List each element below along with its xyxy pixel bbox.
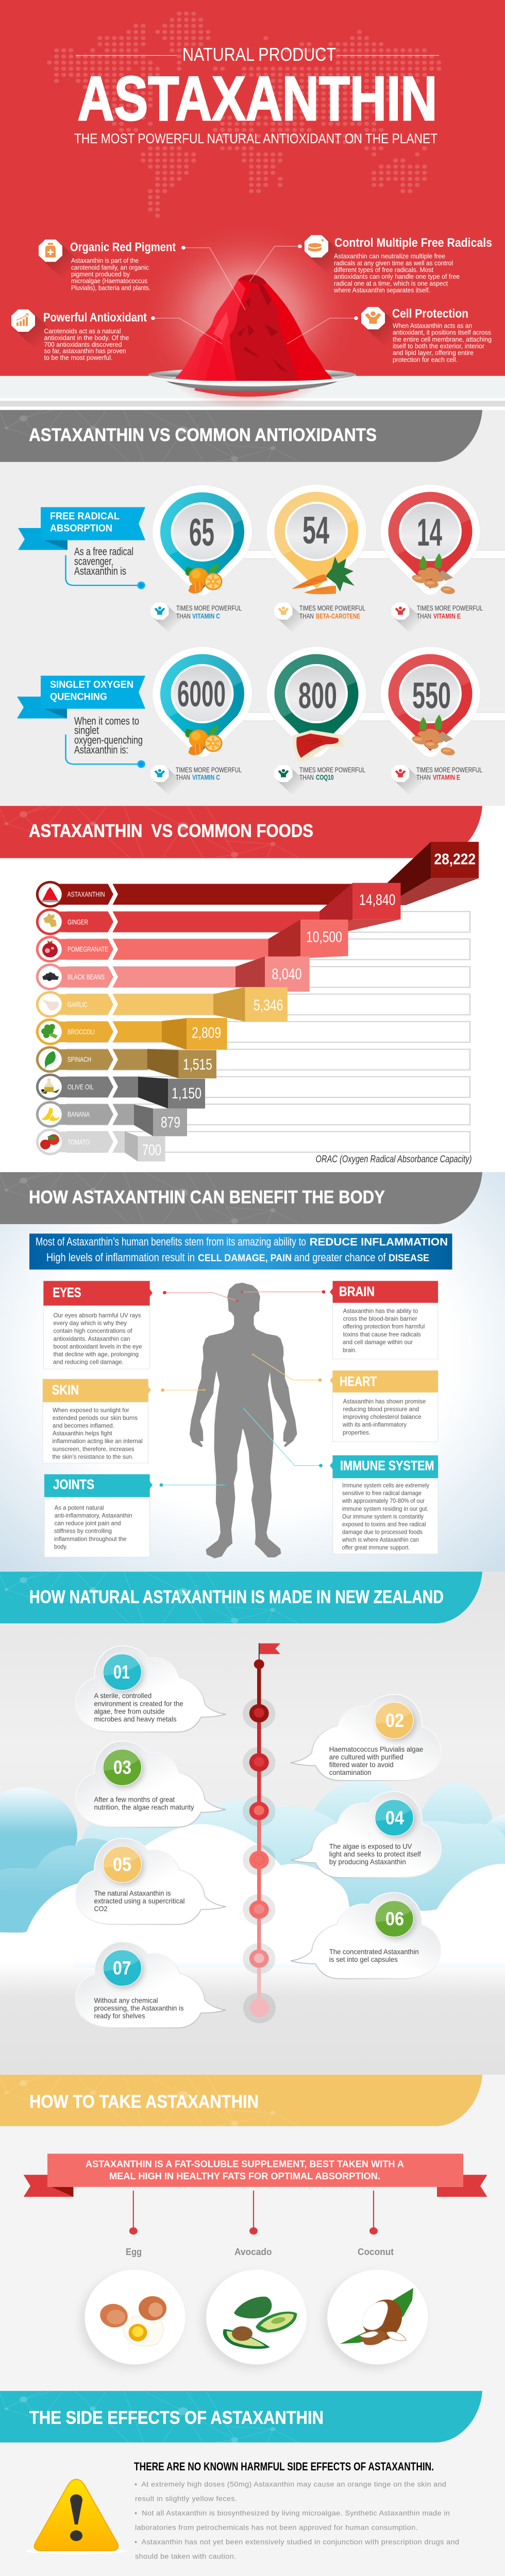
- ribbon: singlet oxygen quenching: QUENCHING: [50, 691, 107, 703]
- feature: control multiple free radicals: [305, 235, 492, 294]
- food: avocado: [206, 2191, 307, 2364]
- feature: control multiple free radicals: Astaxanthin can neutralize multiple free: [334, 252, 445, 260]
- connector strips: [242, 550, 505, 721]
- pin: 550 vitamin e: 550: [412, 675, 451, 716]
- feature: powerful antioxidant: to be the most powerful.: [44, 354, 113, 362]
- feature: cell protection: When Astaxanthin acts as an: [393, 322, 472, 329]
- feature: cell protection: [361, 307, 492, 363]
- banner: reduce inflammation: [29, 1233, 452, 1269]
- step 01: [76, 1646, 226, 1732]
- food: avocado: Avocado: [234, 2246, 272, 2258]
- step 01: A sterile, controlled: [94, 1692, 152, 1700]
- caption: 6000 times vitamin c: VITAMIN C: [192, 774, 220, 782]
- card: brain: brain.: [343, 1347, 357, 1353]
- step 01: algae, free from outside: [94, 1707, 165, 1715]
- step 01: environment is created for the: [94, 1700, 183, 1707]
- card: immune system: with approximately 70-80% of our: [342, 1498, 425, 1504]
- icon: bottle: [39, 240, 80, 279]
- bar: olive oil 1,150: OLIVE OIL: [68, 1083, 94, 1091]
- step 05: 05: [113, 1855, 131, 1875]
- ribbon: free radical absorption: ABSORPTION: [50, 523, 112, 534]
- body silhouette: [190, 1283, 297, 1558]
- food: egg: Egg: [126, 2246, 142, 2258]
- card: skin: the skin’s resistance to the sun.: [53, 1453, 133, 1460]
- card: immune system: damage due to processed foods: [342, 1529, 423, 1535]
- icon: warning triangle: [25, 2479, 127, 2554]
- intro text: singlet oxygen: When it comes to: [74, 715, 139, 727]
- card: eyes: and reducing cell damage.: [53, 1359, 124, 1365]
- panel: astaxanthin vs common antioxidants: [0, 410, 505, 806]
- banner: reduce inflammation: High levels of inflammation result in: [46, 1251, 195, 1264]
- pin: 65 vitamin c: 65: [189, 511, 214, 554]
- card: joints: body.: [54, 1543, 68, 1550]
- card: brain: toxins that cause free radicals: [343, 1331, 421, 1338]
- caption: 54 times beta-carotene: TIMES MORE POWERFUL: [299, 605, 365, 613]
- step 06: The concentrated Astaxanthin: [329, 1948, 419, 1956]
- card: eyes: every day which is why they: [54, 1319, 127, 1327]
- section header: [0, 806, 482, 858]
- banner: reduce inflammation: REDUCE INFLAMMATION: [310, 1235, 448, 1248]
- step 01: 01: [113, 1662, 130, 1683]
- icon: coconut with palm leaf: [340, 2288, 413, 2345]
- caption: 6000 times vitamin c: THAN: [176, 774, 190, 782]
- pin: 54 beta-carotene: 54: [302, 509, 329, 552]
- card: joints: [44, 1475, 153, 1557]
- card: heart: improving cholesterol balance: [343, 1413, 422, 1420]
- caption: 65 times vitamin c: [151, 603, 242, 633]
- banner ribbon: fat-soluble: [24, 2154, 487, 2197]
- section header: HOW ASTAXANTHIN CAN BENEFIT THE BODY: [29, 1187, 385, 1207]
- side effects list: laboratories from petrochemicals has not been approved for human consumption.: [135, 2523, 418, 2531]
- card: brain: BRAIN: [339, 1284, 375, 1299]
- ribbon: singlet oxygen quenching: SINGLET OXYGEN: [50, 680, 133, 690]
- bar: banana 879: BANANA: [68, 1111, 90, 1119]
- feature: cell protection: antioxidant, it positions itself across: [393, 329, 491, 336]
- card: eyes: [43, 1281, 153, 1369]
- food: egg: [85, 2191, 186, 2364]
- card: skin: Astaxanthin helps fight: [53, 1430, 112, 1437]
- eyebrow: natural product: NATURAL PRODUCT: [182, 44, 336, 65]
- card: eyes: EYES: [53, 1285, 81, 1300]
- food: coconut: Coconut: [358, 2246, 394, 2258]
- intro text: free radical: As a free radical: [74, 545, 133, 558]
- section header: [0, 2391, 482, 2443]
- pin: 800 coq10: [266, 647, 366, 761]
- panel: how natural astaxanthin is made in new zealand: [0, 1572, 505, 2075]
- caption: 65 times vitamin c: VITAMIN C: [192, 613, 220, 620]
- card: joints: inflammation throughout the: [54, 1535, 127, 1543]
- feature: powerful antioxidant: antioxidant in the body. Of the: [44, 334, 129, 342]
- bar: olive oil 1,150: 1,150: [172, 1086, 201, 1102]
- bar: tomato 700: [36, 1128, 165, 1161]
- feature: control multiple free radicals: different types of free radicals. Most: [334, 266, 433, 274]
- card: immune system: Our immune system is constantly: [342, 1513, 424, 1520]
- illustration: red powder pile on plate: [148, 275, 356, 397]
- caption: 54 times beta-carotene: BETA-CAROTENE: [316, 613, 360, 620]
- step 04: by producing Astaxanthin: [329, 1858, 406, 1866]
- banner: reduce inflammation: DISEASE: [389, 1253, 429, 1264]
- bar: tomato 700: 700: [142, 1142, 161, 1159]
- background clouds: [0, 1781, 505, 2075]
- feature: control multiple free radicals: radicals at any given time as well as control: [334, 259, 453, 267]
- card: skin: extended periods our skin burns: [53, 1414, 138, 1421]
- card: brain: and cell damage within our: [343, 1338, 413, 1346]
- feature: powerful antioxidant: Powerful Antioxidant: [43, 311, 147, 325]
- caption: 14 times vitamin e: THAN: [417, 613, 431, 620]
- caption: 54 times beta-carotene: THAN: [299, 613, 314, 620]
- caption: 14 times vitamin e: VITAMIN E: [433, 613, 461, 620]
- intro text: singlet oxygen: Astaxanthin is:: [74, 743, 128, 756]
- step 02: [291, 1694, 441, 1781]
- caption: 6000 times vitamin c: TIMES MORE POWERFUL: [176, 767, 242, 774]
- icon: dish: [305, 235, 346, 275]
- caption: 54 times beta-carotene: [275, 603, 365, 633]
- section header: [0, 410, 482, 462]
- card: immune system: [330, 1455, 438, 1554]
- bar: garlic 5,346: GARLIC: [68, 1001, 88, 1009]
- leader lines: [151, 244, 358, 344]
- bar: broccoli 2,809: BROCCOLI: [68, 1028, 95, 1036]
- panel: hero: [0, 0, 505, 411]
- intro text: free radical: [66, 545, 145, 589]
- banner ribbon: fat-soluble: MEAL HIGH IN HEALTHY FATS FOR OPTIMAL ABSORPTION.: [109, 2171, 380, 2182]
- feature: control multiple free radicals: antioxidants can only handle one type of free: [334, 273, 460, 280]
- side effects list: [134, 2480, 459, 2560]
- icon: avocados: [223, 2297, 297, 2349]
- bar: astaxanthin 28,222: ASTAXANTHIN: [68, 891, 105, 899]
- step 02: Haematococcus Pluvialis algae: [329, 1745, 423, 1753]
- card: brain: cross the blood-brain barrier: [343, 1315, 417, 1323]
- step 07: ready for shelves: [94, 2012, 145, 2020]
- card: immune system: offer great immune support.: [342, 1544, 410, 1551]
- intro text: free radical: Astaxanthin is: [74, 565, 126, 577]
- step 01: microbes and heavy metals: [94, 1715, 177, 1723]
- icon: steak: [293, 730, 344, 761]
- card: heart: HEART: [340, 1374, 377, 1389]
- card: heart: properties.: [343, 1429, 371, 1436]
- feature: organic red pigment: pigment produced by: [71, 270, 130, 278]
- panel: astaxanthin vs common foods: [0, 806, 505, 1172]
- step 03: nutrition, the algae reach maturity: [94, 1803, 194, 1811]
- step 03: [76, 1741, 226, 1827]
- card: skin: and becomes inflamed.: [53, 1422, 114, 1429]
- side effects list: result in slightly yellow feces.: [135, 2495, 237, 2502]
- step 05: [76, 1838, 226, 1924]
- panel: how astaxanthin can benefit the body: [0, 1172, 505, 1572]
- intro text: singlet oxygen: oxygen-quenching: [74, 734, 143, 746]
- pin: 800 coq10: 800: [298, 675, 337, 716]
- section header: THE SIDE EFFECTS OF ASTAXANTHIN: [29, 2407, 324, 2428]
- caption: 800 times coq10: COQ10: [316, 774, 334, 782]
- step 05: CO2: [94, 1905, 108, 1913]
- icon: cracked egg: [97, 2296, 166, 2346]
- bar: garlic 5,346: [36, 987, 288, 1022]
- section header: [0, 1172, 482, 1224]
- side effects list: • Not all Astaxanthin is biosynthesized by living microalgae. Synthetic Astaxanthin made in: [134, 2509, 450, 2517]
- bar: pomegranate 10,500: 10,500: [306, 929, 342, 945]
- section header: HOW TO TAKE ASTAXANTHIN: [29, 2091, 259, 2112]
- pin: 14 vitamin e: [380, 484, 480, 595]
- caption: 800 times coq10: THAN: [299, 774, 314, 782]
- section header: [0, 2075, 482, 2126]
- card: eyes: Our eyes absorb harmful UV rays: [54, 1312, 141, 1319]
- step 06: is set into gel capsules: [329, 1956, 398, 1963]
- feature: powerful antioxidant: 700 antioxidants discovered: [44, 341, 122, 348]
- pin: 65 vitamin c: [153, 485, 252, 596]
- step 04: The algae is exposed to UV: [329, 1842, 412, 1850]
- section header: ASTAXANTHIN VS COMMON FOODS: [29, 821, 313, 841]
- side effects list: • Astaxanthin has not yet been extensively studied in conjunction with prescription drugs and: [134, 2538, 459, 2546]
- bar: tomato 700: TOMATO: [68, 1139, 90, 1146]
- panel: the side effects of astaxanthin: [0, 2391, 482, 2560]
- caption: 14 times vitamin e: [392, 603, 483, 633]
- ribbon: free radical absorption: FREE RADICAL: [50, 511, 120, 522]
- bar: ginger 14,840: 14,840: [359, 892, 396, 908]
- caption: 550 times vitamin e: [392, 765, 482, 795]
- step 06: 06: [385, 1909, 404, 1930]
- bar: pomegranate 10,500: POMEGRANATE: [68, 945, 108, 954]
- bar: spinach 1,515: [36, 1046, 216, 1078]
- card: heart: with its anti-inflammatory: [342, 1421, 407, 1428]
- side effects list: • At extremely high doses (50mg) Astaxanthin may cause an orange tinge on the skin and: [134, 2480, 446, 2488]
- panel: how to take astaxanthin: [0, 2075, 505, 2576]
- section header: [0, 1572, 482, 1623]
- card: skin: inflammation acting like an internal: [53, 1438, 142, 1445]
- step 02: 02: [385, 1710, 404, 1732]
- bar: broccoli 2,809: [36, 1018, 227, 1050]
- card: immune system: immune system residing in our gut.: [342, 1505, 429, 1512]
- ribbon: free radical absorption: [18, 507, 145, 550]
- caption: 6000 times vitamin c: [151, 765, 242, 795]
- card: eyes: antioxidants. Astaxanthin can: [54, 1335, 130, 1342]
- intro text: singlet oxygen: [66, 715, 145, 768]
- feature: organic red pigment: microalgae (Haematococcus: [71, 277, 147, 285]
- step 02: are cultured with purified: [329, 1753, 403, 1761]
- icon: rising chart: [11, 310, 53, 349]
- step 04: [291, 1791, 441, 1878]
- bar: banana 879: [36, 1101, 187, 1136]
- feature: organic red pigment: carotenoid family, an organic: [71, 264, 149, 271]
- ribbon: singlet oxygen quenching: [17, 676, 145, 718]
- food: coconut: [327, 2191, 428, 2364]
- feature: powerful antioxidant: so far, astaxanthin has proven: [44, 347, 126, 354]
- pin: 6000 vitamin c: [153, 647, 252, 757]
- card: skin: sunscreen, therefore, increases: [53, 1446, 134, 1452]
- banner ribbon: fat-soluble: ASTAXANTHIN IS A FAT-SOLUBLE SUPPLEMENT, BEST TAKEN WITH A: [86, 2159, 404, 2170]
- pin: 550 vitamin e: [380, 647, 480, 757]
- caption: 65 times vitamin c: TIMES MORE POWERFUL: [176, 605, 242, 613]
- bar: astaxanthin 28,222: 28,222: [434, 851, 476, 868]
- glow behind pile: [138, 221, 359, 411]
- card: heart: [330, 1370, 438, 1442]
- card: skin: SKIN: [52, 1382, 79, 1397]
- side effects list: should be taken with caution.: [135, 2552, 236, 2560]
- pin: 54 beta-carotene: [266, 484, 366, 595]
- card: joints: anti-inflammatory, Astaxanthin: [55, 1512, 132, 1519]
- card: eyes: boost antioxidant levels in the eye: [54, 1343, 142, 1350]
- feature: cell protection: protection for each cell.: [393, 356, 458, 363]
- step 02: filtered water to avoid: [329, 1761, 394, 1769]
- bar chart: [36, 842, 479, 1161]
- caption: 550 times vitamin e: VITAMIN E: [433, 774, 460, 782]
- card: eyes: contain high concentrations of: [54, 1328, 132, 1334]
- timeline: [243, 1643, 280, 2023]
- card: immune system: sensitive to free radical damage: [342, 1489, 422, 1497]
- pin: 14 vitamin e: 14: [417, 511, 442, 554]
- bar: banana 879: 879: [161, 1114, 180, 1131]
- flag: [259, 1643, 280, 1664]
- bar: olive oil 1,150: [36, 1074, 205, 1109]
- card: joints: As a potent natural: [55, 1504, 104, 1511]
- feature: organic red pigment: Astaxanthin is part of the: [71, 257, 139, 264]
- body pointer lines: [160, 1290, 326, 1487]
- step 02: contamination: [329, 1769, 372, 1776]
- step 03: 03: [113, 1757, 131, 1778]
- bar: astaxanthin 28,222: [36, 842, 479, 908]
- bar: ginger 14,840: [36, 883, 401, 935]
- icon: person: [361, 307, 403, 346]
- step 05: extracted using a supercritical: [94, 1897, 185, 1905]
- card: joints: JOINTS: [53, 1477, 94, 1492]
- bar: black beans 8,040: BLACK BEANS: [68, 973, 105, 981]
- caption: 65 times vitamin c: THAN: [176, 613, 191, 620]
- step 05: The natural Astaxanthin is: [94, 1889, 171, 1897]
- icon: carrots: [292, 557, 355, 594]
- bar: spinach 1,515: 1,515: [183, 1057, 212, 1073]
- bar: spinach 1,515: SPINACH: [68, 1056, 91, 1064]
- step 07: Without any chemical: [94, 1996, 158, 2004]
- card: immune system: Immune system cells are extremely: [342, 1482, 430, 1489]
- card: immune system: exposed to toxins and free radical: [342, 1521, 426, 1528]
- feature: powerful antioxidant: Carotenoids act as a natural: [44, 327, 121, 335]
- card: immune system: IMMUNE SYSTEM: [340, 1458, 434, 1473]
- feature: organic red pigment: Organic Red Pigment: [70, 240, 176, 254]
- step 07: [76, 1942, 226, 2028]
- bar: pomegranate 10,500: [36, 920, 348, 962]
- world map dots: [46, 10, 443, 218]
- card: skin: When exposed to sunlight for: [53, 1406, 129, 1414]
- card: brain: [330, 1281, 438, 1359]
- bar: ginger 14,840: GINGER: [68, 919, 88, 926]
- intro text: singlet oxygen: singlet: [74, 724, 99, 737]
- step 04: light and seeks to protect itself: [329, 1850, 421, 1858]
- card: heart: Astaxanthin has shown promise: [343, 1398, 426, 1405]
- card: brain: offering protection from harmful: [343, 1323, 425, 1330]
- bar: black beans 8,040: [36, 956, 310, 992]
- feature: organic red pigment: [39, 240, 176, 292]
- intro text: free radical: scavenger,: [74, 555, 113, 567]
- card: immune system: which is where Astaxanthin can: [342, 1536, 419, 1544]
- banner: reduce inflammation: Most of Astaxanthin’s human benefits stem from its amazing ability to: [36, 1235, 306, 1248]
- banner: reduce inflammation: CELL DAMAGE, PAIN: [198, 1253, 292, 1264]
- card: heart: reducing blood pressure and: [343, 1405, 419, 1413]
- bar: broccoli 2,809: 2,809: [192, 1025, 221, 1041]
- step 03: After a few months of great: [94, 1795, 175, 1803]
- pin: 6000 vitamin c: 6000: [177, 674, 226, 714]
- caption: 550 times vitamin e: THAN: [416, 774, 431, 782]
- bar: garlic 5,346: 5,346: [254, 997, 283, 1014]
- card: brain: Astaxanthin has the ability to: [343, 1308, 418, 1314]
- feature: cell protection: Cell Protection: [392, 307, 468, 320]
- banner: reduce inflammation: and greater chance of: [294, 1251, 386, 1264]
- step 07: 07: [113, 1958, 131, 1979]
- feature: organic red pigment: Pluvialis), bacteria and plants.: [71, 284, 150, 292]
- feature: powerful antioxidant: [11, 310, 147, 362]
- section header: ASTAXANTHIN VS COMMON ANTIOXIDANTS: [29, 425, 377, 445]
- feature: control multiple free radicals: radical one at a time, which is one aspect: [334, 280, 448, 287]
- caption: 800 times coq10: TIMES MORE POWERFUL: [299, 767, 365, 774]
- caption: 800 times coq10: [275, 765, 365, 795]
- feature: cell protection: the entire cell membrane, attaching: [393, 335, 492, 343]
- card: skin: [43, 1379, 151, 1463]
- feature: cell protection: and lipid layer, offering entire: [393, 349, 474, 357]
- card: joints: stiffness by controlling: [54, 1528, 112, 1535]
- bar: black beans 8,040: 8,040: [272, 966, 301, 982]
- card: eyes: that decline with age, prolonging: [54, 1351, 139, 1358]
- step 04: 04: [385, 1808, 404, 1829]
- feature: control multiple free radicals: where Astaxanthin separates itself.: [333, 286, 430, 294]
- feature: cell protection: itself to both the exterior, interior: [393, 342, 485, 350]
- step 06: [291, 1892, 441, 1979]
- step 07: processing, the Astaxanthin is: [94, 2004, 183, 2012]
- card: joints: can reduce joint pain and: [55, 1520, 121, 1527]
